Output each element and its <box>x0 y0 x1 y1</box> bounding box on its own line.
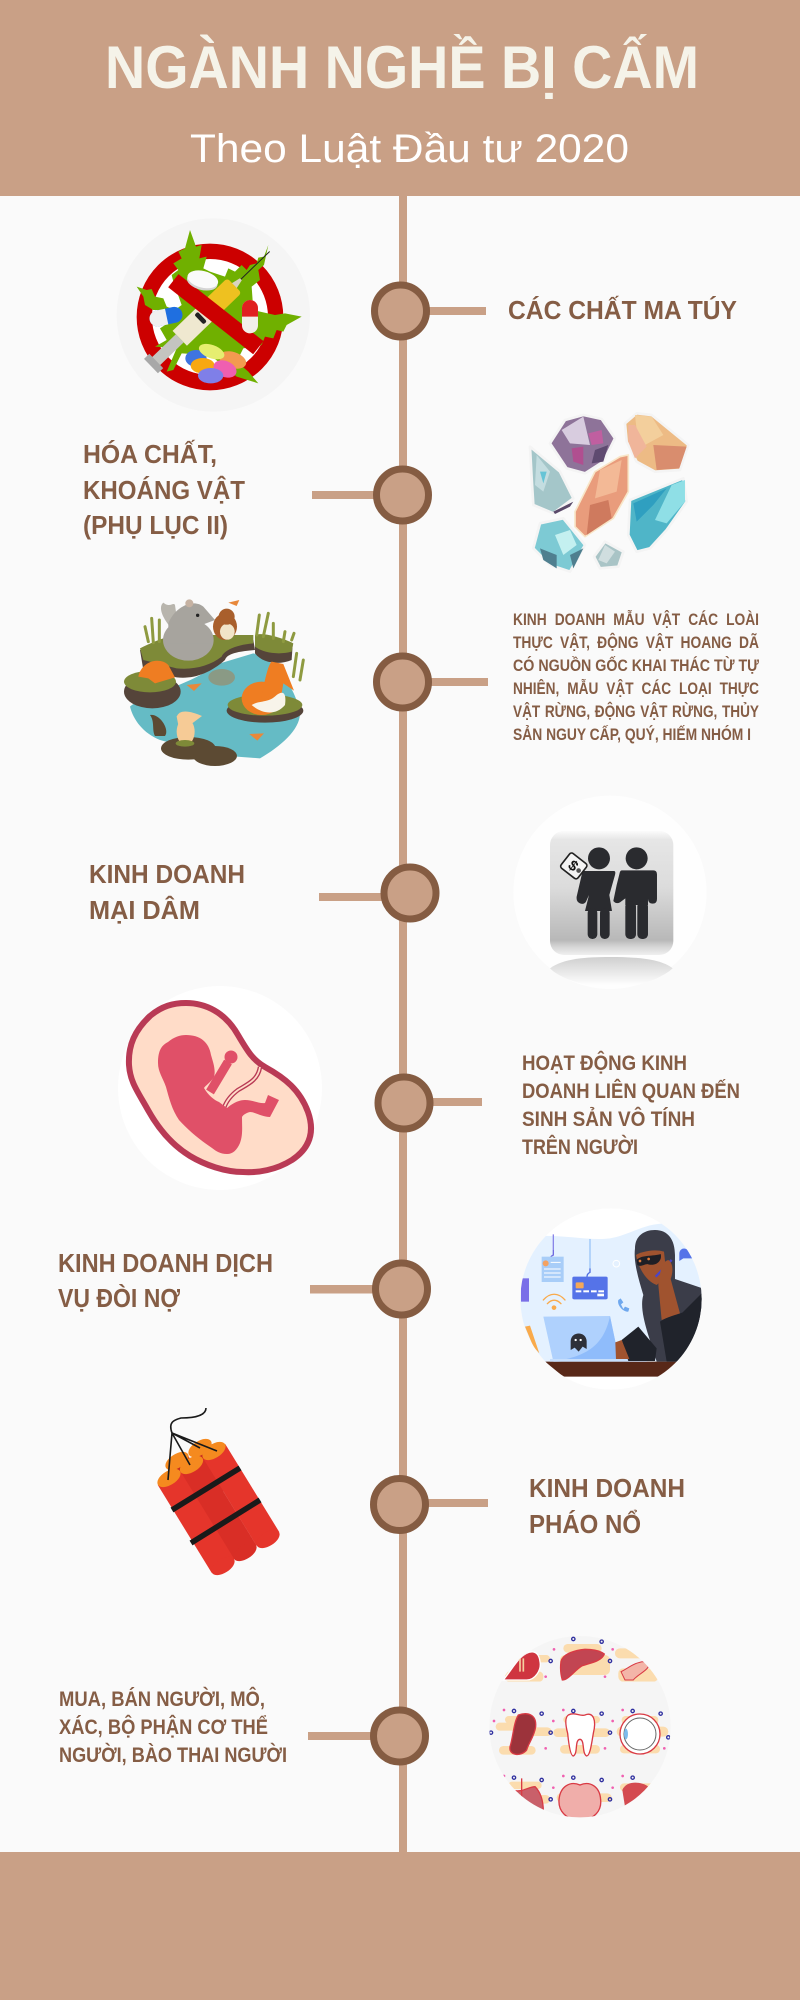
item 7: label: KINH DOANH <box>529 1473 685 1503</box>
item 5: label <box>522 1051 740 1159</box>
item 8: label: XÁC, BỘ PHẬN CƠ THỂ <box>59 1715 268 1739</box>
item 5: label: DOANH LIÊN QUAN ĐẾN <box>522 1079 740 1103</box>
item 2: node and connector <box>312 469 428 521</box>
item 3: node and connector <box>376 656 488 708</box>
item 3: label paragraph: SẢN NGUY CẤP, QUÝ, HIẾM NHÓM I <box>513 725 751 744</box>
item 7: label: PHÁO NỔ <box>529 1509 641 1539</box>
title: NGÀNH NGHỀ BỊ CẤM <box>105 34 699 101</box>
icon: human organs <box>489 1636 671 1820</box>
item 5: label: SINH SẢN VÔ TÍNH <box>522 1107 695 1131</box>
item 4: label: MẠI DÂM <box>89 895 200 925</box>
item 6: label: KINH DOANH DỊCH <box>58 1248 273 1278</box>
subtitle: Theo Luật Đầu tư 2020 <box>190 127 629 171</box>
icon: couple on button <box>513 796 707 989</box>
footer band <box>0 1852 800 2000</box>
item 8: label: NGƯỜI, BÀO THAI NGƯỜI <box>59 1743 287 1767</box>
item 8: label <box>59 1687 287 1767</box>
item 5: label: HOẠT ĐỘNG KINH <box>522 1051 687 1075</box>
item 3: label paragraph: CÓ NGUỒN GỐC KHAI THÁC TỪ TỰ <box>513 655 759 675</box>
icon: crystals <box>530 413 688 572</box>
item 7: label <box>529 1473 685 1539</box>
icon: prohibited drugs <box>117 218 310 412</box>
item 2: label <box>83 439 245 540</box>
item 4: node and connector <box>319 867 436 919</box>
item 6: label: VỤ ĐÒI NỢ <box>58 1283 181 1313</box>
icon: firecracker bundle <box>154 1408 283 1579</box>
icon: wild animals pond <box>124 599 303 766</box>
item 6: label <box>58 1248 273 1313</box>
item 5: node and connector <box>378 1077 482 1129</box>
icon: fetus in womb <box>118 986 322 1190</box>
item 7: node and connector <box>374 1478 488 1530</box>
item 2: label: KHOÁNG VẬT <box>83 475 245 505</box>
item 1: label: CÁC CHẤT MA TÚY <box>508 295 737 325</box>
item 2: label: HÓA CHẤT, <box>83 439 217 469</box>
item 3: label paragraph: KINH DOANH MẪU VẬT CÁC LOÀI <box>513 610 759 629</box>
item 1: node and connector <box>374 285 486 337</box>
icon: couple on button: $ <box>565 858 581 875</box>
icon: hacker on phone <box>520 1224 702 1377</box>
item 4: label <box>89 859 245 925</box>
item 3: label paragraph: THỰC VẬT, ĐỘNG VẬT HOANG DÃ <box>513 632 759 652</box>
timeline vertical line <box>399 196 407 1852</box>
item 2: label: (PHỤ LỤC II) <box>83 510 228 540</box>
item 8: node and connector <box>308 1710 426 1762</box>
header band <box>0 0 800 196</box>
item 4: label: KINH DOANH <box>89 859 245 889</box>
item 6: node and connector <box>310 1263 428 1315</box>
item 3: label paragraph <box>513 610 759 744</box>
item 8: label: MUA, BÁN NGƯỜI, MÔ, <box>59 1687 265 1711</box>
item 5: label: TRÊN NGƯỜI <box>522 1135 638 1159</box>
